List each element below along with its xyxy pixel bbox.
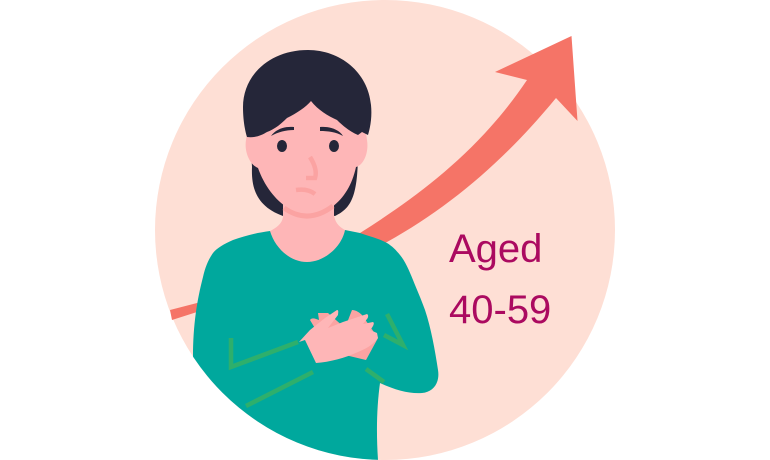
age label: 40-59 bbox=[449, 288, 551, 332]
rising arrow bbox=[170, 36, 578, 320]
chin shadow bbox=[284, 206, 333, 216]
woman figure bbox=[193, 50, 438, 460]
back hand bbox=[310, 310, 378, 360]
face bbox=[246, 95, 367, 214]
age label bbox=[449, 227, 551, 332]
background circle bbox=[155, 0, 615, 460]
sweater bbox=[193, 230, 438, 460]
age label: Aged bbox=[449, 227, 542, 271]
neck bbox=[270, 195, 345, 262]
mouth bbox=[296, 190, 315, 194]
front hair bbox=[243, 50, 371, 137]
sleeve fold lines bbox=[231, 314, 403, 406]
eyes bbox=[277, 140, 287, 152]
back hair bbox=[251, 150, 358, 216]
front hand bbox=[299, 310, 378, 363]
eyebrows bbox=[271, 127, 343, 136]
infographic: woman aged 40-59 with rising arrow bbox=[155, 0, 615, 460]
nose bbox=[306, 157, 316, 178]
